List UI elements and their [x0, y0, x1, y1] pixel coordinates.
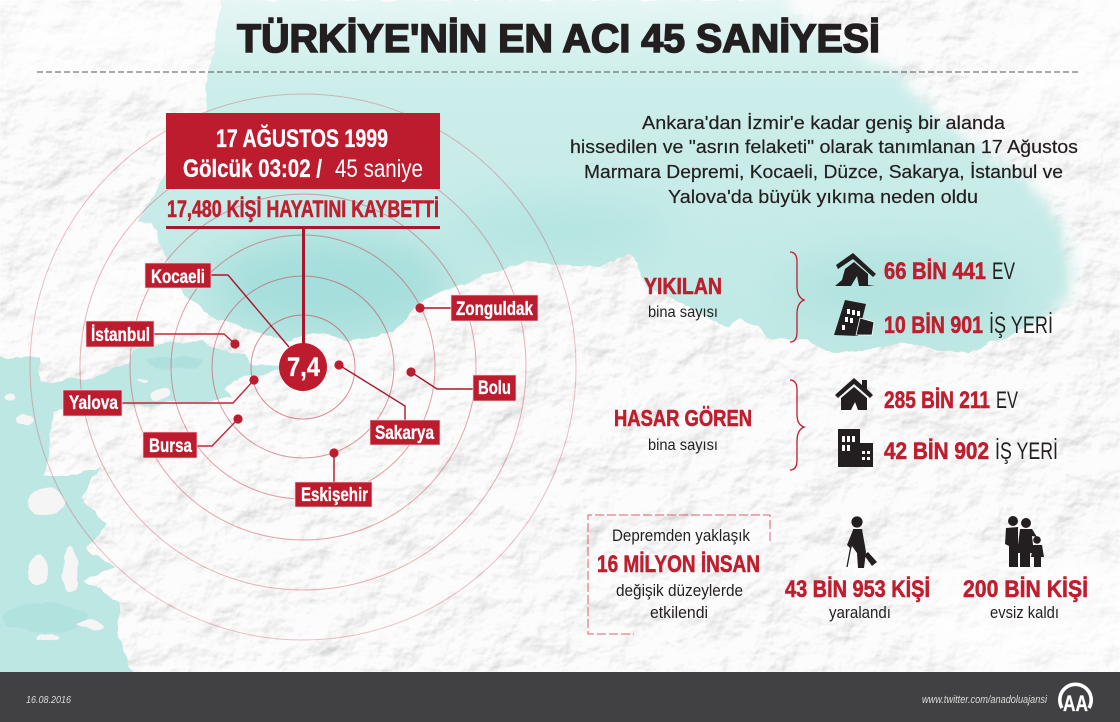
label: Sakarya: Sakarya: [375, 423, 434, 444]
title: TÜRKİYE'NİN EN ACI 45 SANİYESİ: [237, 16, 880, 61]
icon: collapsed office building: [834, 300, 874, 336]
stat: destroyed workplaces: 10 BİN 901: [884, 312, 983, 339]
label: Bursa: Bursa: [149, 436, 192, 457]
footer bar: [0, 672, 1120, 722]
label: Bolu: Bolu: [478, 378, 511, 399]
logo: Anadolu Agency: AA: [1063, 691, 1088, 716]
stat: destroyed homes: 66 BİN 441: [884, 258, 986, 285]
footer bar: www.twitter.com/anadoluajansi: [922, 694, 1047, 706]
icon: damaged house: [835, 378, 873, 410]
headline box: date and place: 45 saniye: [335, 155, 423, 183]
label: İstanbul: İstanbul: [91, 325, 150, 346]
label: Bursa: [143, 414, 243, 458]
headline box: date and place: [166, 113, 440, 189]
intro paragraph: Ankara'dan İzmir'e kadar geniş bir alanda: [642, 113, 1006, 133]
stat: damaged workplaces: 42 BİN 902: [884, 438, 989, 465]
death toll: [166, 196, 440, 229]
heading: destroyed buildings: YIKILAN: [644, 273, 722, 299]
headline box: date and place: 17 AĞUSTOS 1999: [216, 124, 388, 153]
Black Sea: [130, 0, 1120, 360]
stat: damaged homes: EV: [996, 387, 1018, 414]
label: Zonguldak: Zonguldak: [456, 299, 533, 320]
logo: Anadolu Agency: [1060, 684, 1091, 716]
label: Eskişehir: Eskişehir: [301, 485, 368, 506]
intro paragraph: Yalova'da büyük yıkıma neden oldu: [668, 187, 978, 207]
label: Zonguldak: [415, 295, 538, 321]
callout: 16 million people: Depremden yaklaşık: [612, 526, 750, 545]
intro paragraph: Marmara Depremi, Kocaeli, Düzce, Sakarya, İstanbul ve: [584, 162, 1063, 182]
stat: injured: 43 BİN 953 KİŞİ: [785, 576, 930, 603]
stat: destroyed homes: EV: [992, 258, 1015, 285]
callout: 16 million people: 16 MİLYON İNSAN: [597, 551, 760, 578]
icon: collapsed house: [835, 253, 876, 286]
death toll: 17,480 KİŞİ HAYATINI KAYBETTİ: [167, 196, 439, 223]
Aegean islands: [4, 378, 170, 641]
stat: damaged homes: 285 BİN 211: [884, 387, 990, 414]
icon: damaged office building: [838, 429, 873, 467]
epicentre magnitude: 7,4: [287, 352, 320, 382]
stat: homeless: [963, 576, 1088, 622]
icon: injured person: [847, 516, 877, 568]
label: Yalova: Yalova: [69, 393, 118, 414]
heading: damaged buildings: HASAR GÖREN: [614, 405, 752, 431]
connector: headline to epicentre: [302, 228, 305, 346]
label: Sakarya: [334, 360, 440, 445]
seismic rings: [30, 94, 576, 640]
brace: destroyed: [790, 252, 804, 342]
stat: injured: yaralandı: [829, 603, 891, 622]
stat: destroyed workplaces: İŞ YERİ: [989, 312, 1053, 339]
heading: damaged buildings: bina sayısı: [648, 437, 718, 454]
label: Eskişehir: [295, 448, 372, 507]
icon: family: [1005, 516, 1044, 567]
label: Yalova: [63, 375, 259, 416]
footer bar: 16.08.2016: [26, 694, 71, 706]
brace: damaged: [790, 380, 804, 470]
stat: injured: [785, 576, 930, 622]
callout: 16 million people: etkilendi: [650, 603, 708, 622]
label: Bolu: [406, 367, 516, 401]
heading: destroyed buildings: [644, 273, 722, 321]
stat: damaged workplaces: [884, 438, 1058, 465]
stat: homeless: 200 BİN KİŞİ: [963, 576, 1088, 603]
headline box: date and place: Gölcük 03:02 /: [183, 155, 322, 183]
callout: 16 million people: [588, 515, 770, 634]
heading: damaged buildings: [614, 405, 752, 454]
label: Kocaeli: Kocaeli: [151, 267, 205, 288]
epicentre magnitude: [279, 343, 327, 391]
callout: 16 million people: değişik düzeylerde: [616, 581, 743, 600]
stat: damaged workplaces: İŞ YERİ: [995, 438, 1058, 465]
label: İstanbul: [86, 321, 240, 349]
intro paragraph: [570, 113, 1078, 207]
stat: homeless: evsiz kaldı: [990, 603, 1059, 622]
Marmara and Aegean seas: [0, 340, 285, 690]
label: Kocaeli: [145, 263, 289, 347]
heading: destroyed buildings: bina sayısı: [648, 304, 718, 321]
intro paragraph: hissedilen ve "asrın felaketi" olarak tanımlanan 17 Ağustos: [570, 137, 1078, 157]
